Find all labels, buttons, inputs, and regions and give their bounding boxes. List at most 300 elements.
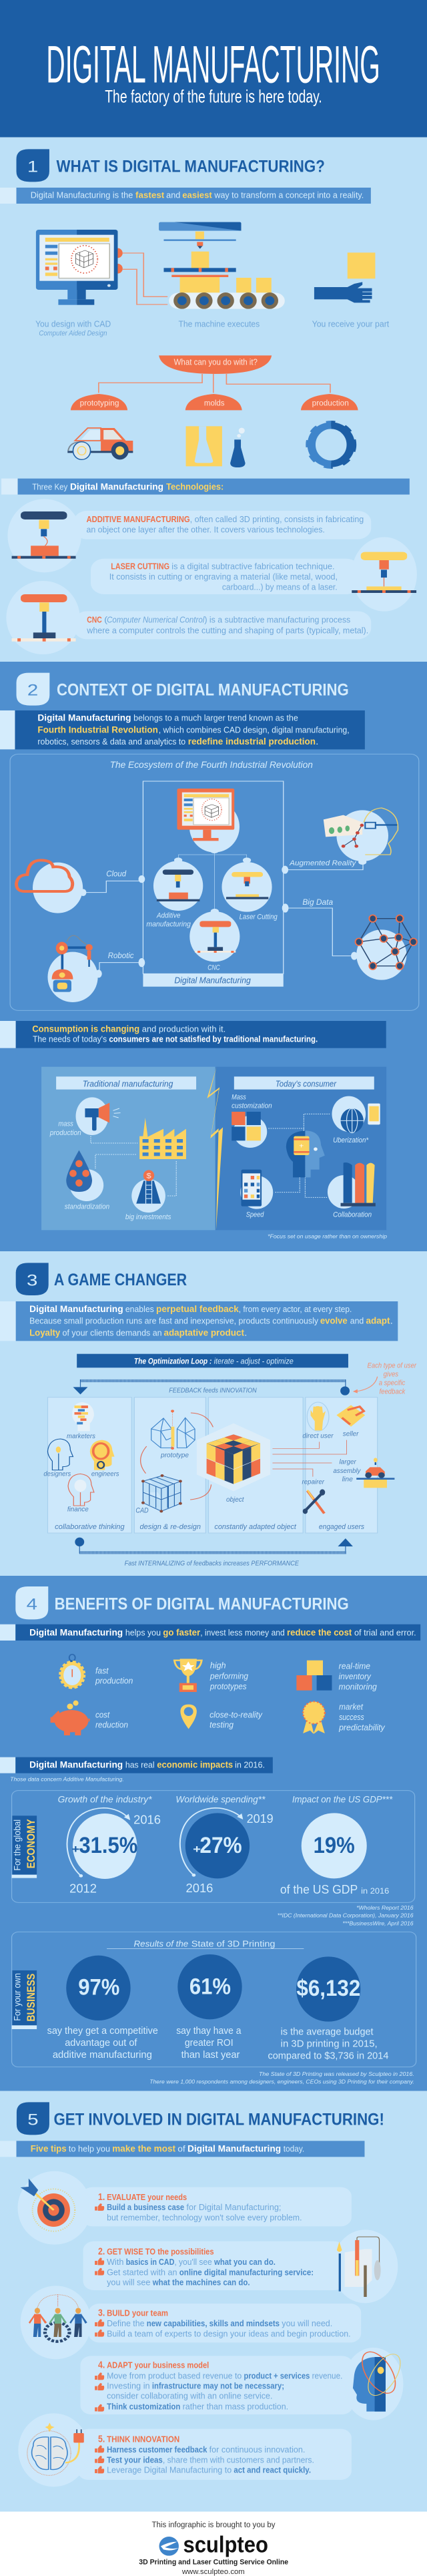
stat: 97%: advantage out of bbox=[65, 2037, 137, 2049]
today's consumer illustrations bbox=[232, 1093, 388, 1240]
consumption bar: The needs of today's bbox=[33, 1035, 107, 1044]
panel: section 2 context bbox=[0, 662, 427, 1251]
stat: 97%: additive manufacturing bbox=[53, 2049, 152, 2061]
stat: worldwide spending: 27% bbox=[199, 1833, 242, 1858]
card: CNC: CNC bbox=[87, 616, 102, 625]
card: laser cutting bbox=[91, 537, 417, 612]
icon: collaboration hands bbox=[328, 1162, 376, 1219]
technologies bar bbox=[1, 479, 410, 495]
benefit: fast production: fast bbox=[95, 1667, 109, 1676]
perpetual feedback bar: Loyalty bbox=[29, 1328, 61, 1338]
node: big data bbox=[282, 897, 417, 980]
tip 4 adapt business model: rather than mass production. bbox=[183, 2402, 288, 2412]
stat: $6,132: in 3D printing in 2015, bbox=[281, 2038, 378, 2049]
tree: what can you do with it: molds bbox=[204, 399, 225, 407]
benefit: market success predictability bbox=[303, 1701, 385, 1734]
icon: team bbox=[29, 2295, 87, 2342]
economic impacts bar: Digital Manufacturing bbox=[29, 1760, 123, 1770]
icon: seller handshake: seller bbox=[343, 1431, 360, 1438]
section 2 badge: 2 bbox=[27, 681, 38, 699]
tip 5 think innovation: Leverage Digital Manufacturing to bbox=[107, 2466, 232, 2475]
digital manufacturing box: Digital Manufacturing bbox=[174, 976, 251, 986]
tip 1 evaluate: for Digital Manufacturing; bbox=[186, 2203, 281, 2213]
step labels bbox=[35, 320, 390, 337]
technology labels bbox=[146, 911, 278, 972]
card: CNC: where a computer controls the cutting and shaping of parts (typically, metal). bbox=[86, 626, 368, 636]
tip 2 get wise: basics in CAD bbox=[126, 2258, 174, 2268]
consumption bar bbox=[0, 1021, 386, 1048]
business side tag: For your own bbox=[13, 1973, 23, 2021]
icon: designers bbox=[43, 1439, 73, 1478]
icon: brain with plug bbox=[27, 2422, 84, 2475]
section 4 badge bbox=[15, 1586, 48, 1619]
card: laser cutting: carboard...) by means of a laser. bbox=[222, 583, 338, 592]
tip 5 think innovation: 5. bbox=[98, 2434, 105, 2444]
five tips bar: of bbox=[177, 2145, 186, 2154]
step labels: Computer Aided Design bbox=[39, 329, 107, 337]
icon: megaphone mass production bbox=[49, 1097, 121, 1137]
larger assembly line: line bbox=[342, 1476, 353, 1483]
object to users arrows bbox=[272, 1440, 347, 1477]
consumption bar: and production with it. bbox=[142, 1025, 226, 1034]
card: additive manufacturing: ADDITIVE MANUFACTURING bbox=[86, 515, 190, 525]
tip 3 build your team: 3. bbox=[98, 2308, 105, 2318]
footer credit: This infographic is brought to you by bbox=[151, 2520, 276, 2529]
panel: section 5 get involved bbox=[0, 2091, 427, 2512]
stat: 97% bbox=[47, 1956, 158, 2061]
benefit: real-time inventory monitoring bbox=[296, 1661, 377, 1692]
technologies bar: Technologies: bbox=[166, 482, 224, 492]
mass customization label: Mass bbox=[232, 1093, 246, 1101]
state of 3D printing note bbox=[149, 2071, 414, 2085]
tip 3 build your team bbox=[21, 2286, 361, 2359]
card: CNC: ( bbox=[104, 616, 107, 625]
card: laser cutting: LASER CUTTING bbox=[111, 562, 169, 572]
tip 1 evaluate bbox=[18, 2171, 352, 2245]
context bar: robotics, sensors & data and analytics to bbox=[37, 737, 185, 747]
perpetual feedback bar: evolve bbox=[320, 1316, 348, 1326]
stat: worldwide spending: 2019 bbox=[247, 1812, 274, 1826]
benefit: close-to-reality testing bbox=[180, 1705, 263, 1730]
benefits bar: , invest less money and bbox=[200, 1629, 285, 1638]
icon: marketers: marketers bbox=[67, 1433, 95, 1440]
icon: seller handshake bbox=[336, 1405, 365, 1438]
icon: marketers bbox=[67, 1402, 95, 1440]
section 5 badge: 5 bbox=[27, 2111, 39, 2129]
tree: what can you do with it bbox=[71, 355, 358, 410]
intro bar: and bbox=[166, 191, 180, 200]
tip 2 get wise: Get started with an bbox=[107, 2268, 177, 2278]
panel: your own business bbox=[12, 1932, 416, 2067]
icon: engineers: engineers bbox=[91, 1471, 119, 1478]
benefit: real-time inventory monitoring: inventory bbox=[339, 1672, 372, 1682]
context bar: Digital Manufacturing bbox=[37, 713, 131, 723]
perpetual feedback bar: enables bbox=[125, 1305, 154, 1315]
icon: engineers bbox=[90, 1440, 119, 1478]
ecosystem diagram bbox=[10, 754, 419, 1010]
card: CNC bbox=[6, 581, 371, 654]
tip 5 think innovation bbox=[18, 2413, 352, 2487]
five tips bar: Five tips bbox=[31, 2144, 67, 2154]
stat: 61%: 61% bbox=[189, 1974, 231, 2000]
intro bar: easiest bbox=[182, 191, 212, 200]
intro bar bbox=[0, 188, 371, 204]
icon: laser lobe bbox=[222, 857, 272, 912]
column: engaged users bbox=[306, 1398, 378, 1533]
icon: finance bbox=[67, 1474, 94, 1513]
key technologies bbox=[1, 479, 417, 654]
stat: growth of the industry bbox=[58, 1795, 161, 1896]
mass customization label: customization bbox=[232, 1101, 272, 1110]
section 3 heading: A GAME CHANGER bbox=[54, 1271, 187, 1289]
tip 1 evaluate: 1. bbox=[98, 2191, 105, 2203]
results title: State of 3D Printing bbox=[191, 1940, 276, 1949]
benefit: cost reduction: reduction bbox=[95, 1721, 128, 1730]
tree: what can you do with it: prototyping bbox=[80, 399, 119, 407]
node: cloud: Cloud bbox=[106, 869, 127, 878]
loop title bar: The Optimization Loop : bbox=[134, 1357, 211, 1365]
tip 1 evaluate: EVALUATE your needs bbox=[107, 2193, 187, 2203]
tip 3 build your team: you will need. bbox=[282, 2319, 332, 2329]
node: robotic bbox=[47, 935, 145, 1002]
today's consumer heading: Today's consumer bbox=[276, 1080, 337, 1089]
icon: uberization globe and phone: Uberization* bbox=[333, 1136, 368, 1144]
icon: direct user hand bbox=[302, 1402, 334, 1440]
perpetual feedback bar: . bbox=[244, 1329, 248, 1338]
icon: standardization drop bbox=[65, 1150, 109, 1211]
tip 5 think innovation: THINK INNOVATION bbox=[107, 2435, 179, 2444]
icon: finance: finance bbox=[67, 1506, 89, 1513]
node: cloud bbox=[17, 860, 145, 913]
column: collaborative thinking: collaborative thinking bbox=[55, 1522, 125, 1531]
larger assembly line: larger bbox=[339, 1459, 357, 1466]
traditional manufacturing heading: Traditional manufacturing bbox=[83, 1080, 173, 1089]
internalizing arrow bbox=[75, 1538, 353, 1567]
step labels: You receive your part bbox=[312, 320, 390, 329]
repairer tools: repairer bbox=[302, 1479, 325, 1486]
context bar: redefine industrial production bbox=[188, 736, 316, 747]
node: robotic: Robotic bbox=[108, 951, 134, 960]
internalizing arrow: Fast INTERNALIZING of feedbacks increases PERFORMANCE bbox=[125, 1560, 299, 1567]
perpetual feedback bar: . bbox=[390, 1317, 393, 1326]
process illustration row bbox=[35, 222, 390, 467]
traditional side illustrations bbox=[49, 1097, 186, 1221]
section 1 heading: WHAT IS DIGITAL MANUFACTURING? bbox=[57, 157, 325, 176]
perpetual feedback bar: Digital Manufacturing bbox=[29, 1304, 123, 1315]
connectors from monitor to machine bbox=[123, 253, 167, 304]
column: collaborative thinking bbox=[43, 1398, 131, 1533]
benefit: cost reduction bbox=[51, 1701, 128, 1735]
stat: growth of the industry: 2012 bbox=[69, 1882, 97, 1896]
tip 2 get wise: GET WISE TO the possibilities bbox=[107, 2247, 214, 2257]
benefit: market success predictability: predictability bbox=[338, 1723, 385, 1733]
global economy side tag bbox=[12, 1815, 37, 1878]
stat: 61%: say thay have a bbox=[176, 2025, 242, 2036]
mass customization label bbox=[232, 1093, 272, 1110]
tip 2 get wise: what the machines can do. bbox=[152, 2278, 250, 2288]
stat: impact on US GDP: in 2016 bbox=[361, 1886, 389, 1896]
section 2 badge bbox=[17, 673, 49, 706]
business side tag: BUSINESS bbox=[26, 1974, 37, 2022]
icon: uberization globe and phone bbox=[332, 1096, 380, 1144]
benefits bar bbox=[0, 1625, 420, 1641]
stat: impact on US GDP: of the US GDP bbox=[280, 1883, 358, 1896]
benefit: market success predictability: market bbox=[339, 1703, 364, 1712]
economy sources: *Wholers Report 2016 bbox=[356, 1905, 414, 1912]
optimization loop diagram bbox=[43, 1354, 417, 1567]
stat: $6,132 bbox=[268, 1956, 388, 2061]
tip 4 adapt business model: ADAPT your business model bbox=[107, 2361, 209, 2370]
panel: section 4 benefits bbox=[0, 1576, 427, 2091]
tip 4 adapt business model: revenue. bbox=[312, 2372, 342, 2381]
five tips bar: today. bbox=[284, 2145, 304, 2154]
panel: global economy bbox=[12, 1791, 415, 1902]
card: CNC: Computer Numerical Control bbox=[107, 616, 205, 625]
section 3 header bbox=[0, 1263, 398, 1341]
tip 5 think innovation: , share them with customers and partners. bbox=[163, 2456, 314, 2465]
five tips bar bbox=[0, 2141, 364, 2157]
technologies bar: Digital Manufacturing bbox=[70, 482, 163, 492]
tip 2 get wise: , you'll see bbox=[174, 2258, 212, 2268]
icon: hand receiving part bbox=[314, 252, 375, 302]
tip 3 build your team: new capabilities, skills and mindsets bbox=[147, 2319, 280, 2329]
icon: target bbox=[21, 2179, 75, 2231]
card: additive manufacturing bbox=[7, 499, 371, 572]
icon: rubik's cube object bbox=[197, 1424, 270, 1504]
icon: consumer head bbox=[286, 1130, 325, 1177]
section 3 badge: 3 bbox=[27, 1271, 37, 1289]
icon: CAD wireframe cube: CAD bbox=[135, 1506, 149, 1514]
tip 5 think innovation: for continuous innovation. bbox=[209, 2445, 305, 2455]
tip 4 adapt business model: infrastructure may not be necessary; bbox=[152, 2382, 284, 2391]
benefit: close-to-reality testing: close-to-reality bbox=[209, 1711, 263, 1720]
tree: what can you do with it: production bbox=[312, 399, 349, 407]
panel: section 1 what is digital manufacturing bbox=[0, 138, 427, 662]
benefits bar: Digital Manufacturing bbox=[29, 1628, 123, 1638]
logo: sculpteo bbox=[159, 2532, 268, 2557]
feedback arrow bbox=[73, 1379, 350, 1396]
benefit: high performing prototypes: performing bbox=[209, 1672, 248, 1681]
stat: growth of the industry: 2016 bbox=[133, 1813, 161, 1827]
tip 4 adapt business model: 4. bbox=[98, 2360, 105, 2370]
card: laser cutting: It consists in cutting or engraving a material (like metal, wood, bbox=[109, 572, 338, 582]
tip 4 adapt business model: Investing in bbox=[107, 2382, 150, 2391]
icon: factory bbox=[139, 1118, 186, 1159]
node: big data: Big Data bbox=[302, 897, 333, 907]
economy sources: ***BusinessWire, April 2016 bbox=[342, 1920, 414, 1927]
footnote: *Focus set on usage rather than on ownership bbox=[268, 1233, 388, 1240]
tip 2 get wise: you will see bbox=[107, 2278, 151, 2288]
icon: designers: designers bbox=[43, 1471, 71, 1478]
tree: what can you do with it: What can you do with it? bbox=[174, 358, 258, 367]
stat: $6,132: compared to $3,736 in 2014 bbox=[268, 2051, 388, 2061]
economy sources bbox=[278, 1905, 414, 1927]
results title bbox=[107, 1940, 304, 1949]
context bar bbox=[0, 710, 365, 749]
step labels: The machine executes bbox=[179, 320, 260, 329]
five tips bar: Digital Manufacturing bbox=[187, 2144, 281, 2154]
icon: direct user hand: direct user bbox=[302, 1432, 334, 1440]
tip 1 evaluate: but remember, technology won't solve every problem. bbox=[107, 2213, 302, 2223]
stat: impact on US GDP bbox=[280, 1795, 393, 1896]
tip 4 adapt business model: product + services bbox=[244, 2372, 310, 2381]
icon: puzzle bbox=[232, 1112, 267, 1148]
section 2 top content bbox=[0, 673, 419, 1010]
perpetual feedback bar: adapt bbox=[366, 1316, 390, 1326]
section 4 badge: 4 bbox=[27, 1595, 37, 1613]
icon: speed phone bbox=[240, 1170, 273, 1219]
benefit: close-to-reality testing: testing bbox=[209, 1721, 234, 1730]
stat: 97%: say they get a competitive bbox=[47, 2025, 158, 2036]
column: design and redesign: design & re-design bbox=[140, 1522, 201, 1531]
context bar: . bbox=[316, 737, 319, 747]
larger assembly line bbox=[334, 1458, 394, 1488]
context bar: , which combines CAD design, digital manufacturing, bbox=[159, 726, 350, 735]
technologies bar: Three Key bbox=[32, 483, 68, 492]
section 1 badge bbox=[17, 149, 49, 182]
consumption bar: Consumption is changing bbox=[32, 1024, 139, 1034]
data note: Those data concern Additive Manufacturing. bbox=[10, 1776, 124, 1783]
tip 5 think innovation: act and react quickly. bbox=[234, 2466, 311, 2475]
digital manufacturing box bbox=[143, 781, 284, 987]
icon: big investments: $ bbox=[146, 1172, 151, 1180]
benefit: high performing prototypes: prototypes bbox=[209, 1682, 247, 1692]
node: augmented reality bbox=[282, 808, 398, 874]
intro bar: fastest bbox=[135, 191, 164, 200]
consumption bar: consumers are not satisfied by traditional manufacturing. bbox=[109, 1035, 318, 1044]
icon: standardization drop: standardization bbox=[65, 1203, 109, 1211]
icon: mold and flask bbox=[186, 426, 246, 467]
benefit: fast production bbox=[61, 1655, 133, 1688]
icon: additive lobe bbox=[153, 857, 203, 911]
benefit: real-time inventory monitoring: real-time bbox=[339, 1662, 370, 1671]
stat: impact on US GDP: Impact on the US GDP*** bbox=[292, 1795, 393, 1805]
intro bar: Digital Manufacturing is the bbox=[31, 191, 133, 200]
icon: megaphone mass production: mass bbox=[58, 1120, 73, 1128]
global economy side tag: ECONOMY bbox=[26, 1819, 37, 1868]
benefits bar: helps you bbox=[125, 1629, 161, 1638]
global economy side tag: For the global bbox=[13, 1819, 23, 1871]
benefit: fast production: production bbox=[95, 1677, 133, 1686]
icon: big investments bbox=[125, 1170, 171, 1221]
panel: footer bbox=[0, 2512, 427, 2576]
intro bar: way to transform a concept into a reality. bbox=[214, 191, 364, 200]
icon: CAD monitor orange bbox=[177, 789, 240, 853]
card: CNC: ) is a subtractive manufacturing process bbox=[204, 616, 350, 625]
card: additive manufacturing: an object one layer after the other. It covers various technologies. bbox=[86, 525, 325, 535]
tagline: 3D Printing and Laser Cutting Service Online bbox=[139, 2558, 288, 2566]
icon: speed phone: Speed bbox=[246, 1211, 264, 1219]
icon: production gear bbox=[310, 423, 353, 466]
tip 4 adapt business model: Think customization bbox=[107, 2402, 180, 2412]
stat: growth of the industry: Growth of the industry* bbox=[58, 1795, 152, 1805]
card: laser cutting: is a digital subtractive fabrication technique. bbox=[171, 562, 335, 572]
economic impacts bar: in 2016. bbox=[235, 1761, 265, 1770]
benefit: cost reduction: cost bbox=[95, 1711, 110, 1720]
tip 2 get wise: what you can do. bbox=[214, 2258, 276, 2268]
context bar: belongs to a much larger trend known as the bbox=[133, 714, 298, 723]
perpetual feedback bar: , from every actor, at every step. bbox=[239, 1305, 352, 1315]
tip 3 build your team: BUILD your team bbox=[107, 2309, 168, 2318]
loop title bar bbox=[77, 1354, 348, 1367]
user feedback callout: gives bbox=[384, 1370, 398, 1378]
tip 2 get wise: 2. bbox=[98, 2246, 105, 2257]
column: constantly adapted object bbox=[208, 1398, 303, 1533]
icon: consumer head: + bbox=[299, 1142, 304, 1150]
icon: megaphone mass production: production bbox=[49, 1128, 81, 1137]
benefit: market success predictability: success bbox=[339, 1713, 364, 1723]
column: design and redesign bbox=[134, 1398, 205, 1533]
tip 5 think innovation: Test your ideas bbox=[107, 2456, 163, 2465]
tip 5 think innovation: Harness customer feedback bbox=[107, 2445, 207, 2455]
context bar: Fourth Industrial Revolution bbox=[37, 725, 158, 735]
stat: worldwide spending: 2016 bbox=[186, 1882, 213, 1895]
stat: impact on US GDP: 19% bbox=[314, 1833, 355, 1858]
icon: CAD monitor bbox=[36, 230, 123, 305]
technology labels: manufacturing bbox=[146, 919, 191, 928]
user feedback callout: feedback bbox=[380, 1387, 406, 1396]
tip 1 evaluate: Build a business case bbox=[107, 2203, 184, 2213]
tip 2 get wise: With bbox=[107, 2258, 123, 2268]
user feedback callout bbox=[353, 1361, 417, 1396]
website: www.sculpteo.com bbox=[181, 2567, 245, 2576]
technology labels: CNC bbox=[207, 963, 220, 972]
benefits bar: reduce the cost bbox=[287, 1628, 352, 1638]
stat: worldwide spending: + bbox=[193, 1843, 201, 1856]
feedback arrow: FEEDBACK feeds INNOVATION bbox=[169, 1387, 257, 1394]
section 3 badge bbox=[16, 1263, 49, 1295]
section 1 badge: 1 bbox=[27, 158, 38, 176]
stat: 61%: than last year bbox=[181, 2049, 240, 2061]
stat: $6,132: is the average budget bbox=[281, 2026, 374, 2037]
perpetual feedback bar: Because small production runs are fast and inexpensive, products continuously bbox=[29, 1317, 318, 1326]
icon: head with atom bbox=[353, 2348, 407, 2412]
five tips bar: to help you bbox=[69, 2145, 110, 2154]
benefit: real-time inventory monitoring: monitoring bbox=[339, 1683, 377, 1692]
icon: big investments: big investments bbox=[125, 1213, 171, 1221]
economic impacts bar bbox=[0, 1757, 273, 1773]
step labels: You design with CAD bbox=[35, 320, 111, 329]
results title: Results of the bbox=[134, 1940, 188, 1949]
panel: header bbox=[0, 0, 427, 138]
benefit: high performing prototypes bbox=[174, 1659, 248, 1692]
tip 2 get wise bbox=[83, 2229, 398, 2303]
stat: $6,132: $6,132 bbox=[296, 1976, 360, 2001]
loop title bar: iterate - adjust - optimize bbox=[214, 1357, 294, 1365]
icon: prototype lattice: prototype bbox=[160, 1452, 189, 1459]
stat: 61% bbox=[176, 1954, 242, 2061]
icon: design tools bbox=[337, 2237, 381, 2297]
icon: collaboration hands: Collaboration bbox=[333, 1211, 372, 1219]
technology labels: Additive bbox=[156, 911, 180, 919]
tip 4 adapt business model: Move from product based revenue to bbox=[107, 2372, 242, 2381]
ecosystem diagram: The Ecosystem of the Fourth Industrial Revolution bbox=[110, 760, 313, 771]
benefit: high performing prototypes: high bbox=[210, 1661, 226, 1671]
tip 4 adapt business model: consider collaborating with an online service. bbox=[107, 2392, 272, 2401]
column: constantly adapted object: constantly adapted object bbox=[214, 1522, 296, 1531]
larger assembly line: assembly bbox=[334, 1468, 362, 1475]
stat: growth of the industry: 31.5% bbox=[79, 1833, 137, 1858]
node: augmented reality: Augmented Reality bbox=[289, 859, 356, 867]
design cycle arrows bbox=[141, 1413, 213, 1500]
tip 3 build your team: Define the bbox=[107, 2319, 145, 2329]
logo: sculpteo: sculpteo bbox=[183, 2532, 268, 2557]
icon: CAD wireframe cube bbox=[135, 1474, 182, 1514]
stat: 97%: 97% bbox=[78, 1975, 119, 2000]
stat: 61%: greater ROI bbox=[185, 2037, 234, 2049]
panel: section 3 a game changer bbox=[0, 1251, 427, 1576]
icon: car bbox=[67, 428, 133, 459]
